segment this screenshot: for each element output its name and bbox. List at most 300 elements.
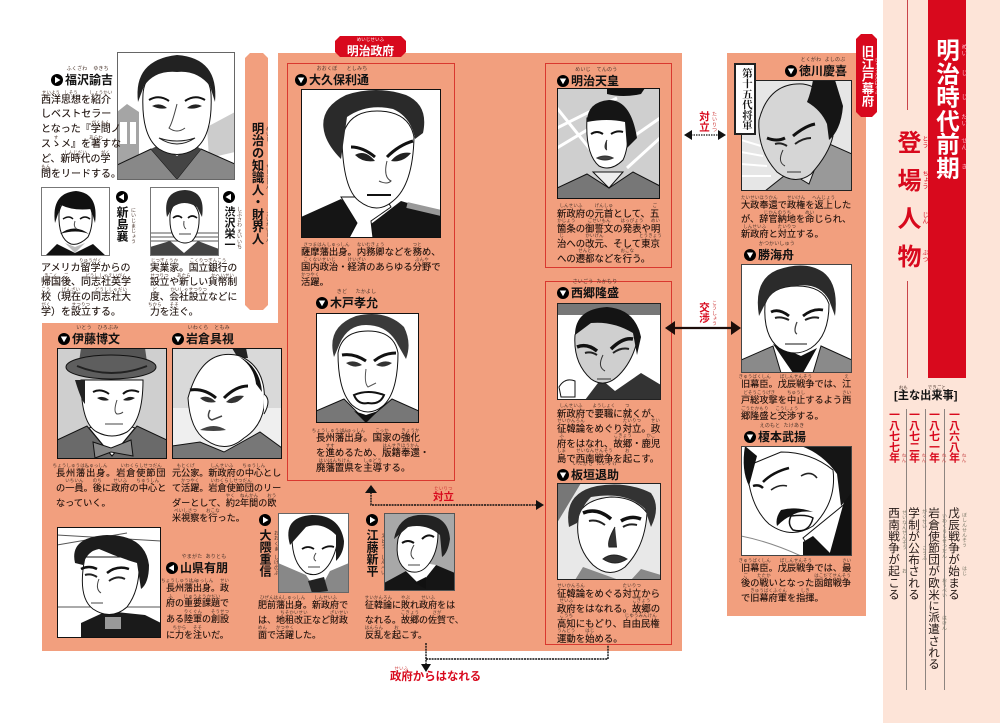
name: Emperor Meiji: 明治天皇 [571, 74, 619, 88]
text: Okubo: 国内政治・経済のあらゆる分野で [301, 262, 441, 272]
card: Eto Shimpei: やぶ [401, 595, 410, 600]
text: Yamagata: そそ [193, 625, 202, 630]
card: Yamagata Aritomo: ちょうしゅうはん [161, 578, 198, 583]
text: Itagaki: はじ [585, 628, 594, 633]
text: Enomoto: しき [801, 588, 810, 593]
portrait: Iwakura [172, 348, 282, 459]
text: Emperor Meiji: じ [559, 233, 564, 238]
text: Niijima: げんざい [62, 287, 80, 292]
panel: former shogunate backdrop [727, 53, 866, 616]
card: Yamagata Aritomo: ありとも [206, 554, 226, 560]
text: Niijima: ご [64, 273, 68, 278]
text: Shibusawa: あたら [177, 273, 191, 278]
timeline: major events: ねん [900, 453, 906, 463]
text: Okubo: かつやく [301, 272, 319, 277]
name: Tokugawa [785, 65, 847, 77]
text: Katsu: え [844, 374, 849, 379]
card: Iwakura Tomomi: もとくげ [177, 463, 195, 468]
portrait: Okubo [301, 89, 441, 238]
text: とくがわ [801, 57, 821, 63]
text: Tokugawa: が、辞官納地を命じられ、 [741, 214, 851, 224]
name: Enomoto [744, 431, 806, 443]
text: こうしょう [711, 300, 717, 326]
text: Shibusawa: 度、会社設立などに [150, 292, 237, 303]
portrait: Katsu [741, 264, 852, 373]
name: Yamagata: 山県有朋 [180, 561, 228, 575]
tag: former Edo shogunate: 旧江戸幕府 [860, 45, 874, 107]
1872 year: 一八七二年 [908, 409, 920, 463]
label band: intellectuals and business leaders: めいじ [265, 126, 271, 142]
text: Saigo: せい [651, 418, 660, 423]
text: Katsu: さい [842, 390, 851, 395]
text: Yamagata: に力を注いだ。 [166, 630, 229, 640]
panel: side strip with title and timeline: おも [899, 385, 908, 390]
text: Saigo: 征韓論をめぐり対立。政 [557, 422, 660, 434]
card: Yamagata Aritomo: しゅっしん [191, 578, 214, 583]
text: Emperor Meiji: はっぴょう [621, 218, 644, 223]
card: Saigo Takamori: つ [625, 403, 630, 408]
text: Okuma: ちそかいせい [280, 610, 308, 615]
text: Iwakura: ねんかん [240, 493, 258, 498]
card: Ito Hirobumi [53, 324, 167, 508]
panel: side strip with title and timeline: できごと [928, 385, 946, 390]
name: Okuma: 大隈 重信 [258, 529, 272, 577]
text: めいじ [575, 67, 591, 73]
panel: side strip with title and timeline: ぶつ [921, 250, 927, 262]
text: Fukuzawa: がく [101, 150, 110, 155]
1868 event [947, 507, 967, 600]
text: Enomoto: ご [743, 573, 748, 578]
text: Kido [312, 428, 429, 474]
label: negotiation: 交渉 [698, 302, 710, 323]
text: Okubo [301, 242, 441, 286]
text: Shibusawa [148, 258, 237, 318]
text: おおくぼ [317, 66, 337, 72]
text: Katsu: 郷隆盛と交渉する。 [741, 410, 824, 420]
card: Eto Shimpei: せいかんろん [365, 595, 392, 600]
text: せいふ [394, 666, 408, 671]
card: Ito Hirobumi: しゅっしん [85, 463, 108, 468]
label band: intellectuals and business leaders: ちしきじん [265, 164, 271, 190]
text: Iwakura [172, 463, 281, 522]
text: Ito [53, 463, 166, 508]
1871 event [927, 507, 947, 669]
red box: Saigo and Itagaki [545, 281, 672, 645]
text: Enomoto: きゅうばくふぐん [750, 588, 787, 593]
text: ひろぶみ [98, 325, 118, 331]
card: Tokugawa Yoshinobu [734, 63, 852, 243]
text: Fukuzawa: しベストセラー [41, 109, 111, 120]
text: Itagaki: 高知にもどり、自由民権 [557, 618, 660, 628]
text: Shibusawa: 力を注ぐ。 [150, 307, 198, 318]
text: Saigo: ふ [559, 433, 564, 438]
portrait: Saigo [557, 303, 661, 400]
text: Kido: 廃藩置県を主導する。 [316, 462, 410, 474]
portrait: Eto [384, 513, 455, 591]
text: えのもと [760, 423, 780, 429]
text: Emperor Meiji: おこな [620, 248, 634, 253]
card: Yamagata Aritomo [57, 527, 229, 643]
decorative heading: characters: 登 場 人 物 [893, 130, 920, 282]
text: Saigo: 府をはなれ、故郷・鹿児 [557, 438, 660, 448]
text: Ito: せいふ [113, 478, 127, 483]
arrow: negotiation between Saigo and Katsu [664, 320, 742, 336]
text: Saigo: こきょう [614, 433, 632, 438]
text: かつ [759, 241, 769, 247]
text: たかよし [356, 289, 376, 295]
text: Okuma: は、地租改正など財政 [258, 614, 348, 624]
text: たいりつ [711, 111, 717, 132]
text: Katsu: こうしょう [775, 406, 798, 411]
timeline: major events: がくせい [921, 509, 926, 529]
text: Shibusawa: かへいせい [211, 273, 234, 278]
card: Okubo Toshimichi: ないむきょう [357, 242, 385, 247]
card: Iwakura Tomomi: しんせいふ [211, 463, 234, 468]
1868 year [948, 409, 966, 463]
name: Iwakura: 岩倉具視 [186, 332, 234, 346]
text: Katsu: 旧幕臣。戊辰戦争では、江 [741, 378, 851, 388]
portrait: Itagaki [557, 483, 661, 580]
card: Okubo Toshimichi: しゅっしん [327, 242, 350, 247]
card: Itagaki Taisuke [557, 469, 661, 644]
timeline: major events: はけん [941, 616, 946, 631]
text: よしのぶ [825, 57, 845, 63]
text: Fukuzawa: 問をリードする。 [41, 169, 121, 180]
text: Fukuzawa: す [54, 135, 58, 140]
timeline: major events: ねん [960, 453, 966, 463]
label: leaving the government: 政府からはなれる [390, 671, 481, 683]
card: Saigo Takamori [557, 287, 661, 467]
text: Fukuzawa: スゝメ』を著すな [41, 139, 121, 150]
text: きゅうえどばくふ [875, 58, 880, 94]
card: Emperor Meiji [557, 75, 661, 267]
text: Niijima: 学）を設立する。 [41, 307, 121, 318]
text: Enomoto: はこだてせんそう [814, 573, 851, 578]
text: Kido: を進めるため、版籍奉還・ [316, 448, 429, 458]
text: Emperor Meiji: への遷都などを行う。 [557, 252, 650, 264]
text: Fukuzawa: しんじだい [64, 150, 87, 155]
text: Katsu [741, 376, 851, 424]
text: Okuma: 面で活躍した。 [258, 630, 321, 640]
text: Itagaki: こうち [559, 613, 573, 618]
card: Enomoto Takeaki [741, 431, 852, 607]
card: Tokugawa Yoshinobu: せいけん [787, 195, 805, 200]
text: Iwakura: やく [226, 493, 235, 498]
text: さいごう [573, 279, 593, 285]
text: Katsu: ちゅうし [787, 390, 805, 395]
name: Okuma [259, 514, 271, 577]
text: Yamagata [166, 580, 229, 643]
text: Emperor Meiji: 箇条の御誓文の発表や明 [557, 222, 660, 234]
card: Kido Takayoshi: きょうか [401, 428, 420, 433]
card: Emperor Meiji: しんせいふ [560, 203, 583, 208]
text: Okubo: こくないせいじ [304, 257, 336, 262]
card: Fukuzawa Yukichi: しそう [64, 90, 78, 95]
name: Fukuzawa [51, 65, 113, 87]
name: Eto [366, 514, 378, 577]
text: Emperor Meiji: せんと [578, 248, 592, 253]
text: Niijima: 校（現在の同志社大 [41, 292, 131, 303]
text: Eto: 征韓論に敗れ政府をは [365, 600, 455, 610]
text: Enomoto: で旧幕府軍を指揮。 [741, 592, 824, 602]
title band: Meiji early period: じ [960, 94, 966, 100]
card: Okuma Shigenobu: おおくま [273, 531, 279, 551]
text: Shibusawa: 実業家。国立銀行の [150, 262, 237, 274]
card: Saigo Takamori: ようしょく [592, 403, 615, 408]
text: Iwakura: かつやく [181, 478, 199, 483]
name: Shibusawa: 渋沢 栄一 [223, 206, 235, 250]
text: Kido: 長州藩出身。国家の強化 [316, 432, 420, 444]
text: Enomoto: たたか [757, 573, 771, 578]
portrait: Ito [57, 348, 167, 459]
text: Saigo: しま [557, 448, 566, 453]
text: たいすけ [597, 461, 617, 467]
1868 event: 戊辰戦争 が 始 まる [947, 507, 960, 600]
text: Shibusawa: そそ [170, 302, 179, 307]
timeline: major events: せいなんせんそう [901, 510, 906, 550]
label band: intellectuals and business leaders [245, 53, 268, 310]
text: Yamagata: ある陸軍の創設 [166, 614, 229, 624]
card: Okuma Shigenobu: ひぜんはん [260, 595, 283, 600]
card: Emperor Meiji: ご [652, 203, 657, 208]
1871 year: 一八七一年 [928, 409, 940, 463]
text: Okubo: 活躍。 [301, 276, 329, 286]
1877 event [887, 507, 906, 600]
red box: Okubo and Kido [287, 63, 455, 481]
seal: fifteenth shogun [734, 63, 756, 135]
name: Niijima [115, 191, 136, 244]
text: Eto: こきょう [401, 610, 419, 615]
portrait: Emperor Meiji [557, 88, 660, 199]
portrait: Tokugawa [741, 80, 852, 191]
name: Saigo: 西郷隆盛 [571, 286, 619, 300]
card: Eto Shimpei: えとう [380, 533, 386, 549]
card: Iwakura Tomomi [172, 324, 282, 522]
arrow: opposition between Okubo group and Saigo group [364, 484, 546, 512]
text: いとう [76, 325, 92, 331]
text: Itagaki: せいふ [559, 598, 573, 603]
text: Niijima: せつりつ [72, 302, 90, 307]
text: Ito: いちいん [65, 478, 84, 483]
text: Enomoto [741, 560, 851, 606]
1877 year: 一八七七年 [888, 409, 900, 463]
text: Okuma: めん [258, 625, 267, 630]
text: たいりつ [434, 486, 453, 491]
text: Itagaki: じゆうみんけん [625, 613, 657, 618]
text: Okubo: けいざい [348, 257, 366, 262]
card: Enomoto Takeaki: きゅうばくしん [739, 558, 771, 563]
tag: Meiji government [335, 36, 406, 57]
tag: Meiji government: めいじせいふ [357, 36, 384, 42]
text: Iwakura: 米視察を行った。 [172, 512, 245, 522]
title band: Meiji early period: めい [960, 44, 966, 56]
timeline heading [894, 384, 957, 402]
text: Iwakura: 元公家。新政府の中心とし [172, 468, 281, 478]
timeline: major events: ねん [940, 453, 946, 463]
title band: Meiji early period [928, 0, 966, 378]
card: Shibusawa Eiichi: しぶさわ [236, 207, 242, 227]
card: Itagaki Taisuke: たいりつ [623, 583, 641, 588]
timeline: major events: お [901, 568, 906, 573]
card: Shibusawa Eiichi [148, 187, 242, 318]
portrait: Okuma [278, 513, 349, 593]
text: Eto: さが [432, 610, 442, 615]
text: Enomoto: 後の戦いとなった函館戦争 [741, 578, 851, 588]
timeline heading: [主な出来事] [894, 390, 957, 402]
text: Saigo: せいなんせんそう [576, 448, 613, 453]
card: Iwakura Tomomi: ちゅうしん [242, 463, 265, 468]
card: Emperor Meiji: げんしゅ [595, 203, 613, 208]
name: Itagaki: 板垣退助 [571, 468, 619, 482]
text: Tokugawa: 大政奉還で政権を返上した [741, 200, 851, 210]
card: Fukuzawa Yukichi: ふくざわ [67, 66, 87, 72]
tag: Meiji government: 明治政府 [347, 44, 394, 58]
text: Itagaki: 征韓論をめぐる対立から [557, 588, 660, 598]
text: Okuma: かつやく [276, 625, 294, 630]
text: Okubo: ぶんや [415, 257, 429, 262]
text: Niijima: どうししゃえいがく [85, 273, 127, 278]
name: Saigo [557, 287, 619, 299]
card: Okuma Shigenobu: しゅっしん [283, 595, 306, 600]
text: たかもり [597, 279, 617, 285]
timeline: major events [887, 409, 967, 690]
card: Eto Shimpei: せいふ [421, 595, 435, 600]
text: Shibusawa: かいしゃせつりつ [170, 287, 207, 292]
text: Enomoto: 旧幕臣。戊辰戦争では、最 [741, 562, 851, 572]
text: Iwakura: べいしさつ [174, 508, 197, 513]
name: Kido: 木戸孝允 [330, 296, 378, 310]
text: きど [337, 289, 347, 295]
text: Emperor Meiji [557, 206, 660, 266]
card: Okuma Shigenobu: しんせいふ [314, 595, 337, 600]
text: Katsu: どそうこうげき [743, 390, 775, 395]
text: Fukuzawa [41, 90, 121, 180]
text: Iwakura: おこな [206, 508, 220, 513]
text: Yamagata: 府の重要課題で [166, 598, 229, 608]
1877 event: 西南戦争 が 起 こる [887, 507, 900, 600]
portrait: Kido [316, 313, 419, 423]
text: Tokugawa: じかんのうち [764, 210, 791, 215]
label: opposition top: 対立 [698, 111, 710, 132]
timeline: major events: いわくらしせつだん [941, 514, 946, 558]
text: Saigo [557, 406, 660, 466]
text: Fukuzawa: ど、新時代の学 [41, 154, 110, 165]
text: Okuma: ざいせい [330, 610, 348, 615]
name: Yamagata [166, 562, 228, 574]
text: Itagaki: 運動を始める。 [557, 632, 623, 644]
name: Kido [316, 288, 378, 310]
card: Enomoto Takeaki: さい [842, 558, 851, 563]
text: Saigo: たいりつ [623, 418, 641, 423]
seal: fifteenth shogun: 第十五代将軍 [740, 68, 751, 130]
text: Ito: のち [93, 478, 102, 483]
1871 year [928, 409, 946, 463]
text: Niijima: きこく [44, 273, 58, 278]
text: Iwakura: て活躍。岩倉使節団のリー [172, 482, 281, 492]
text: Yamagata: ふ [168, 594, 173, 599]
title band: Meiji early period: き [960, 164, 966, 170]
text: Fukuzawa: あらわ [89, 135, 103, 140]
text: いたがき [573, 461, 593, 467]
text: Iwakura: いわくらしせつだん [210, 478, 252, 483]
name: Niijima: 新島 襄 [115, 206, 129, 242]
text: Niijima: どうししゃだい [95, 287, 127, 292]
label: opposition middle: 対立 [433, 491, 454, 503]
text: Katsu: 戸総攻撃を中止するよう西 [741, 394, 851, 404]
text: Ito: なっていく。 [56, 498, 111, 508]
panel: side strip with title and timeline [883, 0, 1000, 723]
text: Eto: なれる。故郷の佐賀で、 [365, 614, 464, 624]
card: Okubo Toshimichi [295, 66, 441, 286]
text: Okuma [258, 598, 348, 642]
name: Eto: 江藤 新平 [365, 529, 379, 577]
text: Saigo: かご [646, 433, 656, 438]
text: Eto [365, 598, 464, 642]
text: Niijima: こう [41, 287, 51, 292]
timeline: major events: おうべい [941, 578, 946, 598]
text: てんのう [597, 67, 617, 73]
card: Shibusawa Eiichi: えいいち [236, 229, 242, 249]
text: Saigo: お [625, 448, 630, 453]
card: Niijima Jo: にいじま [130, 208, 136, 228]
name: Fukuzawa: 福沢諭吉 [65, 73, 113, 87]
card: Yamagata Aritomo: やまがた [182, 554, 202, 560]
name: Ito: 伊藤博文 [72, 332, 120, 346]
text: Iwakura: おう [267, 493, 276, 498]
text: Fukuzawa: がくもん [92, 120, 110, 125]
text: Kido: しゅどう [363, 458, 382, 463]
card: Okuma Shigenobu: しげのぶ [273, 555, 279, 575]
title band: Meiji early period: じ [960, 70, 966, 76]
text: Katsu: ごうたかもり [741, 406, 769, 411]
text: Niijima: がく [41, 302, 51, 307]
red box: Emperor Meiji [545, 63, 672, 268]
text: Emperor Meiji: 治への改元、そして東京 [557, 238, 660, 248]
text: Ito: の一員。後に政府の中心と [56, 483, 166, 493]
text: Niijima: 帰国後、同志社英学 [41, 277, 131, 288]
arrow: leaving the government [419, 642, 613, 673]
arrow: opposition between emperor and shogun [683, 128, 727, 142]
text: Emperor Meiji: めい [651, 218, 660, 223]
card: Okubo Toshimichi: つと [413, 242, 422, 247]
card: Fukuzawa Yukichi: ゆきち [93, 66, 109, 72]
panel: side strip with title and timeline: とう [921, 136, 927, 148]
name: Okubo: 大久保利通 [309, 73, 369, 87]
text: Yamagata: ちから [173, 625, 186, 630]
name: Enomoto: 榎本武揚 [758, 430, 806, 444]
text: Ito: 長州藩出身。岩倉使節団 [56, 468, 166, 478]
1877 year [888, 409, 906, 463]
name: Tokugawa: 徳川慶喜 [799, 64, 847, 78]
text: Iwakura: ダーとして、約2年間の欧 [172, 498, 276, 508]
name: Itagaki [557, 469, 619, 481]
text: かいしゅう [769, 241, 795, 247]
card: Niijima Jo [41, 187, 136, 318]
text: Fukuzawa: となった『学問ノ [41, 124, 121, 135]
card: Ito Hirobumi: ちょうしゅうはん [53, 463, 89, 468]
name: Emperor Meiji [557, 75, 619, 87]
text: Kido: すす [326, 443, 335, 448]
1872 event: 学制 が 公布 される [907, 507, 920, 600]
text: Shibusawa: せつりつ [150, 273, 169, 278]
card: Itagaki Taisuke: せいかんろん [557, 583, 585, 588]
name: Okubo [295, 66, 369, 87]
text: Fukuzawa: 西洋思想を紹介 [41, 94, 111, 106]
card: Niijima Jo: じょう [130, 228, 136, 244]
text: Katsu: きゅうばくしん [739, 374, 771, 379]
timeline: major events: ぼしんせんそう [961, 513, 966, 548]
card: Kido Takayoshi: ちょうしゅうはん [312, 428, 349, 433]
